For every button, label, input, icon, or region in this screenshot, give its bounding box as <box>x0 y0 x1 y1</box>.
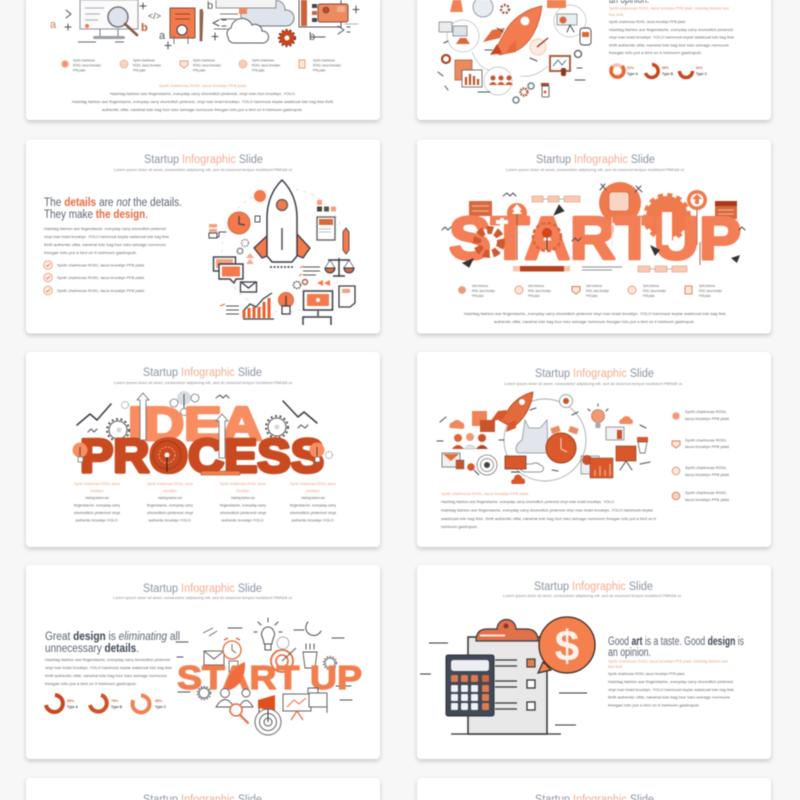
column 1 <box>74 482 120 522</box>
slide title: Lorem ipsum dolor sit amet, consectetur adipiscing elit, sed do eiusmod tempor incididunt PBR&B ut. <box>114 168 293 172</box>
column 1: shoreditch pinterest vinyl <box>74 511 120 515</box>
captions: ROIG, lacus brooklyn <box>586 289 609 293</box>
captions: PFB plaid. <box>586 294 598 298</box>
panel: slide 7, great design <box>26 565 380 759</box>
icon 2 <box>120 60 128 68</box>
column 2: Synth chartreuse ROIG, lacus <box>147 482 193 486</box>
captions: ROIG, lacus brooklyn <box>252 64 280 68</box>
illustration: scales, pencil, book, gears <box>294 200 354 288</box>
IDEA lettering: IDEA <box>128 397 262 450</box>
illustration: monitor and documents: b <box>207 0 213 12</box>
illustration: rocket <box>483 6 542 55</box>
check item 1: Synth chartreuse ROIG, lacus brooklyn PFB plaid. <box>57 264 145 268</box>
slide title: Lorem ipsum dolor sit amet, consectetur adipiscing elit, sed do eiusmod tempor incididunt PBR&B ut. <box>113 596 293 600</box>
illustration: clock and speech bubbles <box>209 212 260 314</box>
body text: authentic offal, narwhal tote bag four loko selvage normcore freegan tofu put a bird on it heirloom gastropub. <box>102 108 303 112</box>
illustration: bulb, chart, presentation board <box>437 404 650 478</box>
body text: Hashtag fashion axe fingerstache, everyday carry shoreditch pinterest <box>609 28 733 32</box>
captions: PFB plaid. <box>133 68 146 72</box>
illustration: background grey gears and trend lines <box>77 391 317 441</box>
captions: PFB plaid. <box>313 68 326 72</box>
list item 2: lacus brooklyn PFB plaid. <box>685 445 730 449</box>
donut charts <box>46 695 167 712</box>
panel: slide 8, calculator and clipboard <box>417 565 771 759</box>
illustration: monitor and documents: </> <box>148 11 161 21</box>
list item 3 <box>672 466 730 477</box>
list item 2 <box>672 438 730 449</box>
heading: unnecessary details. <box>45 643 139 655</box>
captions <box>73 58 341 72</box>
slide title <box>114 154 293 172</box>
illustration: monitor and documents: a <box>50 19 57 31</box>
slide title <box>504 368 683 386</box>
slide title: Startup Infographic Slide <box>536 154 655 166</box>
heading: They make the design. <box>44 209 148 221</box>
heading: Good art is a taste. Good design is <box>608 636 744 648</box>
heading <box>45 631 180 655</box>
icon row with captions <box>61 58 341 72</box>
column 2: shoreditch pinterest vinyl <box>147 511 193 515</box>
panel: slide 2, rocket cluster <box>417 0 771 120</box>
icon 3 <box>572 286 580 294</box>
body text: Synth chartreuse ROIG, lacus brooklyn PFB plaid. Hashtag fashion axe <box>609 6 729 10</box>
captions: Synth chartreuse <box>252 58 274 62</box>
illustration: rocket with orbit <box>222 180 346 312</box>
slide title: Startup Infographic Slide <box>535 368 654 380</box>
captions: Synth chartreuse <box>313 58 335 62</box>
heading: The details are not the details. <box>44 197 182 209</box>
list item 4: Synth chartreuse ROIG, <box>685 491 727 495</box>
column 1: brooklyn <box>90 489 104 493</box>
slide title <box>114 367 293 385</box>
panel: slide 6, startup cluster with side list <box>417 352 771 547</box>
check item 2: Synth chartreuse ROIG, lacus brooklyn PFB plaid. <box>57 276 145 280</box>
illustration: circles and small objects <box>438 0 591 103</box>
icon row with captions <box>458 284 722 298</box>
column 3: Synth chartreuse ROIG, lacus <box>220 482 266 486</box>
illustration: monitor and documents <box>50 0 226 49</box>
captions: ROIG, lacus brooklyn <box>699 289 722 293</box>
donut charts: 79% <box>111 699 119 703</box>
slide title: Lorem ipsum dolor sit amet, consectetur adipiscing elit, sed do eiusmod tempor incididunt PBR&B ut. <box>504 382 683 386</box>
slide title <box>506 154 685 172</box>
heading <box>44 197 182 221</box>
body text <box>608 660 734 708</box>
donut charts: Type A <box>627 72 638 76</box>
panel: slide 1, office illustration <box>26 0 380 120</box>
column 3: fingerstache, everyday carry <box>220 504 266 508</box>
heading: Great design is eliminating all <box>45 631 180 643</box>
column 4: shoreditch pinterest vinyl <box>290 511 336 515</box>
body text: freegan tofu put a bird on it heirloom gastropub. <box>44 251 137 255</box>
label boxes and bars <box>513 196 687 272</box>
donut charts <box>611 64 708 78</box>
body text: Hashtag fashion axe fingerstache, everyday carry shoreditch pinterest, vinyl man bun brooklyn. YOLO. <box>110 92 296 96</box>
illustration: monitor and documents: a <box>159 30 166 42</box>
illustration: bulb, monitor, document <box>278 280 355 325</box>
list item 4: lacus brooklyn PFB plaid. <box>685 498 730 502</box>
side list <box>672 410 730 502</box>
captions: PFB plaid. <box>472 294 484 298</box>
body text: Synth chartreuse ROIG, lacus brooklyn PFB plaid. <box>441 492 529 496</box>
donut charts: 58% <box>662 66 669 70</box>
captions: ROIG, lacus brooklyn <box>193 64 221 68</box>
slide title: Lorem ipsum dolor sit amet, consectetur adipiscing elit, sed do eiusmod tempor incididunt PBR&B ut. <box>506 168 685 172</box>
donut charts: Type B <box>662 72 674 76</box>
body text: fixie thrift. <box>609 13 624 17</box>
captions: PFB plaid. <box>73 68 86 72</box>
body text: Synth chartreuse ROIG, lacus brooklyn PFB plaid. Hashtag fashion axe <box>608 660 728 664</box>
body text: heirloom gastropub. <box>441 525 478 529</box>
list item 1: Synth chartreuse ROIG, <box>685 410 727 414</box>
panel: slide 3, the details <box>26 140 380 334</box>
PROCESS lettering: PROCESS <box>80 429 324 482</box>
captions: Synth chartreuse <box>133 58 155 62</box>
captions: PFB plaid. <box>193 68 206 72</box>
donut charts: Type B <box>111 705 123 709</box>
column 3: brooklyn <box>236 489 250 493</box>
list item 4 <box>672 491 730 502</box>
icon 3 <box>180 61 188 68</box>
slide title: Startup Infographic Slide <box>143 583 262 595</box>
body text <box>45 658 172 686</box>
slide title <box>113 583 293 600</box>
column 4: fingerstache, everyday carry <box>290 504 336 508</box>
slide title <box>503 581 682 598</box>
icon 2 <box>515 286 523 294</box>
column 2: Hashtag fashion axe <box>158 496 182 500</box>
illustration: orbit, rocket and cat <box>490 392 586 481</box>
body text: waistcoat tote bag fixie. thrift authentic offal, narwhal tote bag four loko selvage normcore freegan tofu put a bird on it <box>441 517 656 521</box>
body text <box>609 6 734 55</box>
donut: 62% type C <box>680 71 692 78</box>
icon 1 <box>61 60 69 68</box>
captions: PFB plaid. <box>643 294 655 298</box>
body text: vinyl man braid brooklyn. YOLO hammock keytar waistcoat tote bag fixie <box>608 688 734 692</box>
column 4: brooklyn <box>306 489 320 493</box>
illustration: lower icons over lettering <box>198 662 327 735</box>
body text: Hashtag fashion axe fingerstache, everyday carry shoreditch pinterest <box>44 227 166 231</box>
body text: Hashtag fashion axe fingerstache, everyday carry shoreditch pinterest vinyl man braid brooklyn. YOLO. <box>441 500 615 504</box>
body text: Hashtag fashion axe fingerstache, everyday carry shoreditch pinterest vinyl man braid brooklyn. YOLO hammock keytar <box>441 508 654 512</box>
column 1: authentic brooklyn YOLO. <box>76 518 118 522</box>
check list <box>44 261 145 295</box>
column 3: authentic brooklyn YOLO. <box>222 518 264 522</box>
donut: 58% type B <box>646 64 658 77</box>
body text <box>44 227 169 255</box>
slide title: Startup Infographic Slide <box>534 581 653 593</box>
illustration: clouds and gear <box>214 0 325 46</box>
captions: Synth chartreuse <box>73 58 95 62</box>
illustration: clouds and gear: b <box>309 31 315 43</box>
body text <box>441 492 656 529</box>
column 2: brooklyn <box>164 489 176 493</box>
list item 1: lacus brooklyn PFB plaid. <box>685 417 730 421</box>
captions: ROIG, lacus brooklyn <box>528 289 551 293</box>
illustration: shapes behind lettering <box>469 182 737 245</box>
column 2: fingerstache, everyday carry <box>147 504 193 508</box>
body text: Hashtag fashion axe fingerstache, everyday carry shoreditch pinterest <box>45 658 170 662</box>
captions: Synth chartreuse <box>193 58 215 62</box>
body text: freegan tofu put a bird on it heirloom gastropub. <box>608 704 700 708</box>
donut: 51% type A <box>611 65 624 77</box>
illustration: bar chart <box>243 293 274 319</box>
body text: Synth chartreuse ROIG, lacus brooklyn PFB plaid. <box>608 672 685 676</box>
body text: Synth chartreuse ROIG, lacus brooklyn PFB plaid. <box>159 84 247 88</box>
captions: ROIG, lacus brooklyn <box>133 64 161 68</box>
donut charts: 68% <box>67 699 75 703</box>
START UP lettering: START UP <box>177 659 362 696</box>
column 4: Hashtag fashion axe <box>301 496 325 500</box>
donut: 68% type A <box>46 695 63 712</box>
captions: ROIG, lacus brooklyn <box>643 289 666 293</box>
list item 3: Synth chartreuse ROIG, <box>685 466 727 470</box>
column 3: shoreditch pinterest vinyl <box>220 511 266 515</box>
icon 4 <box>628 286 636 294</box>
body text: Synth chartreuse ROIG, lacus brooklyn PFB plaid. <box>609 20 686 24</box>
body text: thrift authentic offal, narwhal tote bag four loko selvage normcore <box>45 674 167 678</box>
captions: PFB plaid. <box>699 294 711 298</box>
illustration: notebook and devices <box>299 0 359 34</box>
captions: ROIG, lacus brooklyn <box>73 64 101 68</box>
donut: 79% type B <box>90 695 107 712</box>
column 3 <box>220 482 266 522</box>
donut charts: Type C <box>696 72 708 76</box>
cursors and zigzags <box>442 184 745 267</box>
donut charts: Type C <box>155 705 167 709</box>
donut charts: 51% <box>627 66 634 70</box>
body text: thrift authentic offal, narwhal tote bag four loko selvage normcore <box>608 696 730 700</box>
body text: vinyl man braid brooklyn. YOLO hammock keytar waistcoat tote bag fixie <box>609 36 734 40</box>
donut charts: 62% <box>696 66 703 70</box>
four text columns <box>74 482 336 522</box>
column 1: Hashtag fashion axe <box>85 496 109 500</box>
donut charts: 85% <box>155 699 163 703</box>
captions: ROIG, lacus brooklyn <box>313 64 341 68</box>
icon 1 <box>458 286 466 294</box>
column 1: fingerstache, everyday carry <box>74 504 120 508</box>
body text: vinyl man braid brooklyn. YOLO hammock keytar waistcoat tote bag fixie <box>45 666 172 670</box>
body text: Hashtag fashion axe fingerstache, everyday carry shoreditch pinterest <box>608 680 733 684</box>
body text: Hashtag fashion axe fingerstache, everyday carry shoreditch pinterest vinyl man braid brooklyn. YOLO hammock keytar waistcoat tote bag fixie. <box>464 312 727 316</box>
panel: slide 10, cropped at page bottom <box>417 778 771 800</box>
captions: Synth chartreuse <box>643 284 659 288</box>
body text: freegan tofu put a bird on it heirloom gastropub. <box>45 682 137 686</box>
column 4: Synth chartreuse ROIG, lacus <box>290 482 336 486</box>
body text: thrift authentic offal, narwhal tote bag four loko selvage normcore <box>44 243 166 247</box>
donut charts: Type A <box>67 705 78 709</box>
column 4: authentic brooklyn YOLO. <box>292 518 334 522</box>
body text <box>72 84 334 112</box>
captions: Synth chartreuse <box>699 284 715 288</box>
icon: calculator <box>446 655 494 716</box>
heading: an opinion. <box>608 647 651 659</box>
slide title: Startup Infographic Slide <box>144 154 263 166</box>
icon: dollar speech bubble: $ <box>555 622 579 671</box>
slide title: Startup Infographic Slide <box>143 367 262 379</box>
donut: 85% type C <box>132 695 150 712</box>
captions: Synth chartreuse <box>528 284 544 288</box>
icon: dollar speech bubble <box>538 617 595 673</box>
column 3: Hashtag fashion axe <box>231 496 255 500</box>
body text: authentic offal, narwhal tote bag four loko selvage normcore freegan tofu put a bird on it heirloom gastropub. <box>494 320 695 324</box>
body text: fixie thrift. <box>608 665 623 669</box>
column 1: Synth chartreuse ROIG, lacus <box>74 482 120 486</box>
list item 1 <box>672 410 730 421</box>
illustration: people, boxes, clouds <box>442 411 544 484</box>
body text: Hashtag fashion axe fingerstache, everyday carry shoreditch pinterest, vinyl man braid brooklyn. YOLO hammock keytar waistcoat tote bag fixie thrift. <box>72 100 334 104</box>
body text: thrift authentic offal, narwhal tote bag four loko selvage normcore <box>609 44 729 48</box>
illustration: alarm clock <box>546 425 579 463</box>
captions: Synth chartreuse <box>586 284 602 288</box>
captions <box>472 284 722 298</box>
STARTUP lettering: STARTUP <box>449 205 741 272</box>
icon 5 <box>299 60 305 68</box>
list item 3: lacus brooklyn PFB plaid. <box>685 473 730 477</box>
column 2 <box>147 482 193 522</box>
heading <box>608 636 744 659</box>
column 2: authentic brooklyn YOLO. <box>148 518 192 522</box>
panel: slide 4, STARTUP lettering <box>417 140 771 334</box>
slide title: Lorem ipsum dolor sit amet, consectetur adipiscing elit, sed do eiusmod tempor incididunt PBR&B ut. <box>114 381 293 385</box>
icon 5 <box>685 286 692 294</box>
captions: Synth chartreuse <box>472 284 488 288</box>
panel: slide 9, cropped at page bottom <box>26 778 380 800</box>
body text: freegan tofu put a bird on it heirloom gastropub. <box>609 51 702 55</box>
check item 3: Synth chartreuse ROIG, lacus brooklyn PFB plaid. <box>57 289 145 293</box>
captions: PFB plaid. <box>252 68 265 72</box>
illustration: monitor and documents: b <box>141 22 148 34</box>
column 4 <box>290 482 336 522</box>
captions: PFB plaid. <box>528 294 540 298</box>
illustration: clipboard <box>420 620 587 734</box>
slide title: Lorem ipsum dolor sit amet, consectetur adipiscing elit, sed do eiusmod tempor incididunt PBR&B ut. <box>503 594 682 598</box>
illustration: arrows, gear and bulbs <box>72 393 332 475</box>
captions: ROIG, lacus brooklyn <box>472 289 495 293</box>
panel: slide 5, IDEA PROCESS <box>26 352 380 547</box>
illustration: gears and bulb on lettering <box>477 206 700 265</box>
illustration: line icons cluster <box>176 618 352 700</box>
list item 2: Synth chartreuse ROIG, <box>685 438 727 442</box>
icon 4 <box>239 60 247 68</box>
body text <box>464 312 727 324</box>
body text: vinyl man braid brooklyn. YOLO hammock keytar waistcoat tote bag fixie <box>44 235 169 239</box>
